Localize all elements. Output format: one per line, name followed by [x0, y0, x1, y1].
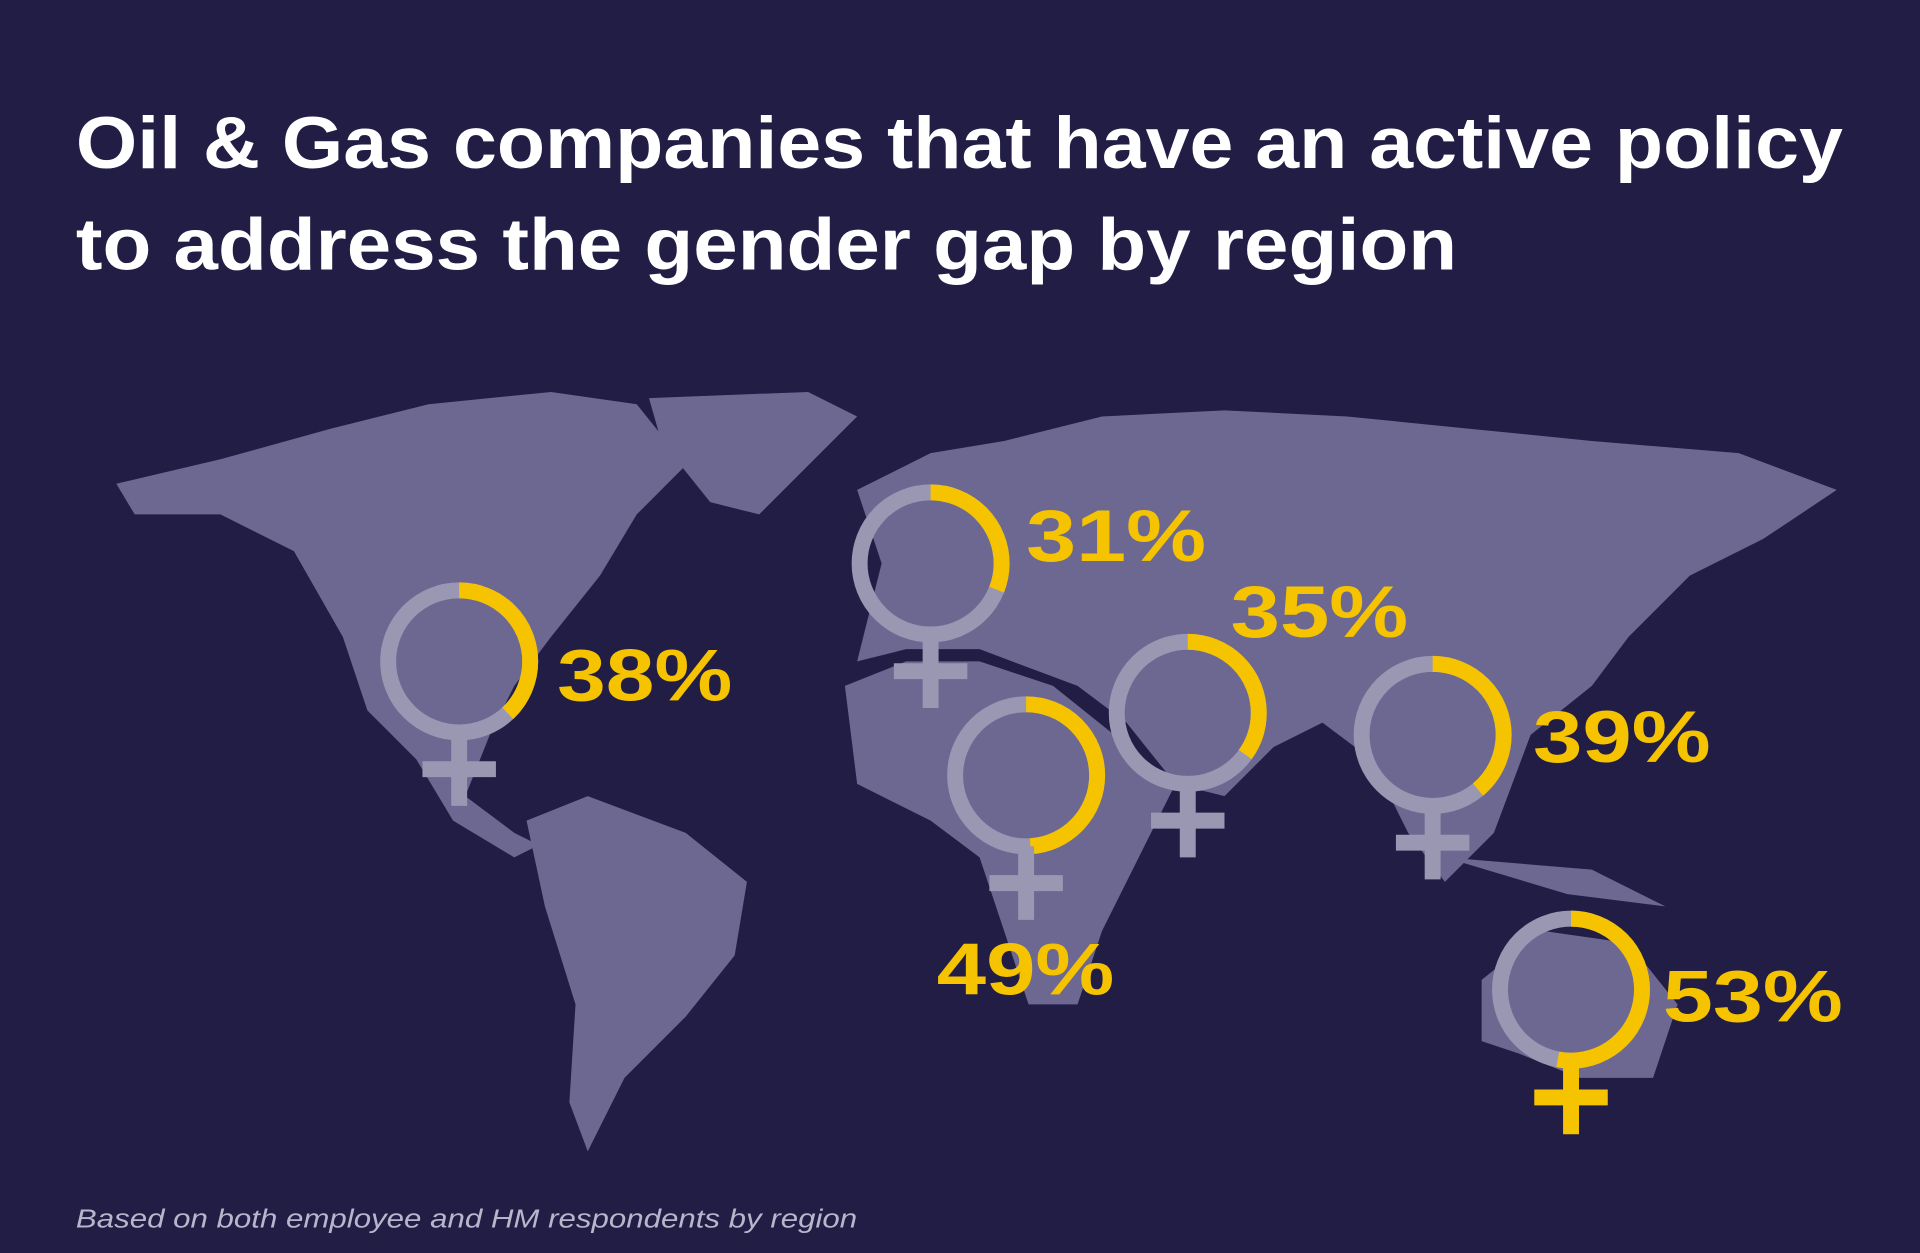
- label 38%: 38%: [557, 634, 732, 717]
- footnote: Based on both employee and HM respondents by region: [76, 1205, 857, 1233]
- label 31%: 31%: [1026, 494, 1206, 577]
- icon: venus 31% Europe: [860, 492, 1002, 708]
- title: Oil & Gas companies that have an active policy: [76, 101, 1843, 184]
- title: to address the gender gap by region: [76, 202, 1457, 285]
- label 49%: 49%: [937, 928, 1114, 1011]
- icon: venus 35% Middle East: [1117, 642, 1259, 857]
- icon: venus 39% Asia: [1362, 664, 1504, 879]
- title: [76, 101, 1843, 285]
- label 39%: 39%: [1533, 695, 1711, 778]
- label 53%: 53%: [1663, 954, 1843, 1038]
- world map: [116, 392, 1837, 1151]
- icon: venus 49% Africa: [955, 704, 1097, 920]
- icon: venus 38% North America: [388, 590, 530, 806]
- icon: venus 53% Australia: [1500, 919, 1642, 1134]
- label 35%: 35%: [1231, 570, 1408, 653]
